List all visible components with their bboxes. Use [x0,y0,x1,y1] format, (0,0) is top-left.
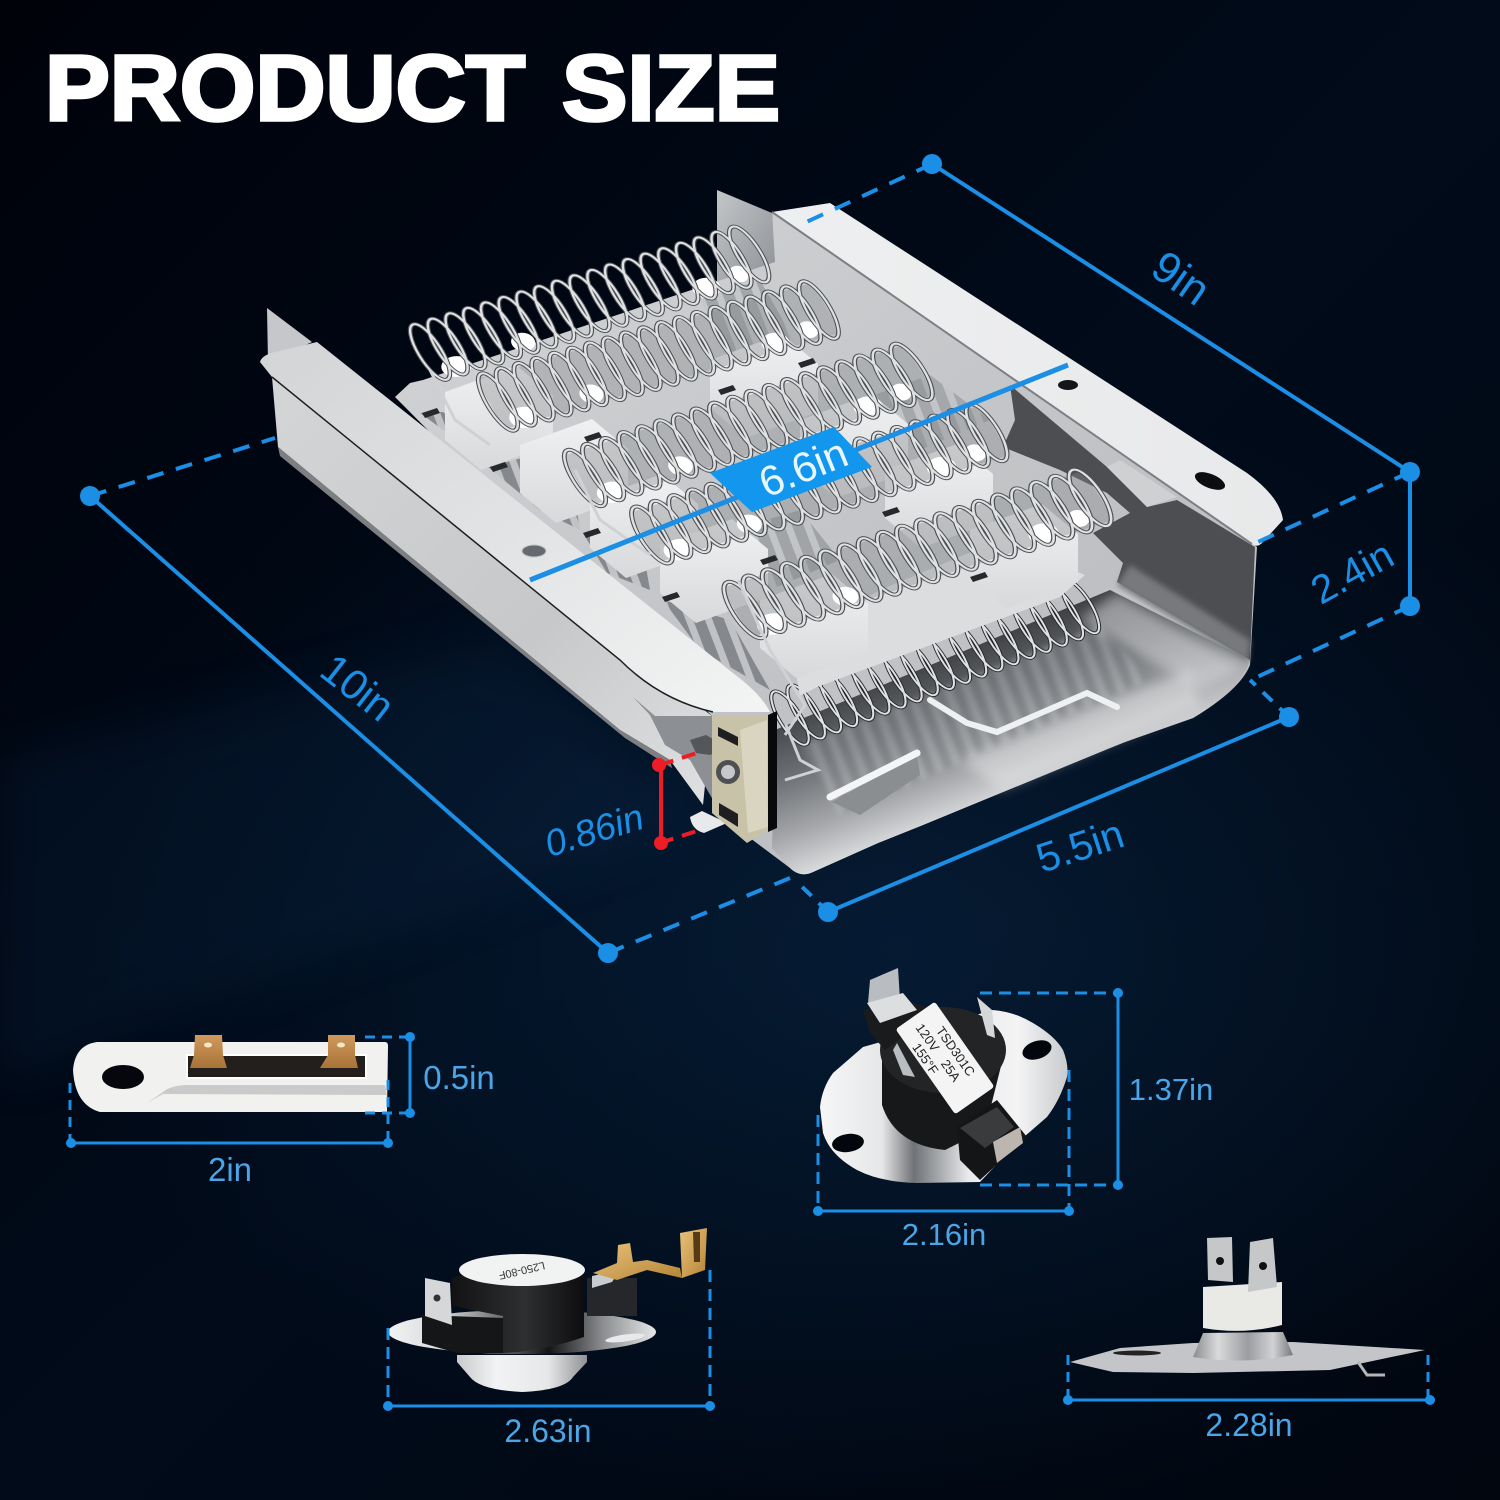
thermal fuse [73,1035,388,1112]
dimension: 2.4in [1255,472,1420,678]
plate clips [422,358,988,602]
coil row 2 [471,278,847,435]
fuse dimension: 2in: 2in [208,1151,252,1188]
coil row 1 [403,223,777,384]
dimension: 0.86in [540,752,700,865]
dimension: 5.5in [795,680,1299,922]
thermostat dimension: 2.16in: 2.16in [902,1217,986,1252]
floor patches [420,280,1000,690]
terminal block [712,711,777,843]
right rail [772,203,1283,546]
thermostat L250-80F [388,1228,707,1392]
coil row 5 [716,466,1120,643]
rating label: TSD301C [933,1024,978,1079]
dimension: 10in: 10in [312,644,403,730]
thermostat dimension: 2.16in [813,1070,1074,1252]
dimension: 9in: 9in [1143,242,1219,315]
thermostat TSD301C [820,968,1068,1183]
back flange [717,190,776,282]
coil row 4 [624,401,1016,568]
dark right wall [1003,385,1255,662]
rail hole [1058,380,1078,390]
mica plates [445,334,1085,696]
left rail [260,342,770,712]
lower tray reflection [772,590,1250,874]
dimension: 9in [800,154,1420,542]
bracket dimension: 2.28in: 2.28in [1205,1407,1293,1443]
fuse dimension: 0.5in: 0.5in [423,1059,495,1096]
coil leads [430,370,818,780]
rail hole [522,545,546,557]
rail slot [1193,469,1227,493]
thermostat bracket [1070,1237,1425,1375]
terminal tabs [690,735,727,833]
left rail wall [272,377,712,805]
thermostat L250-80F: L250-80F [497,1259,546,1281]
left back flange [267,308,312,362]
thermostat dimension: 2.63in [383,1270,715,1449]
dimension: 0.86in: 0.86in [540,796,648,865]
dimension: 6.6in: 6.6in [752,429,854,506]
rating label [896,1002,994,1114]
heater assembly [260,190,1283,874]
dimension: 2.4in: 2.4in [1304,533,1401,613]
fuse dimension: 2in [66,1080,393,1188]
fuse dimension: 0.5in [365,1032,495,1118]
title: PRODUCT [45,36,525,140]
rating label: 25A [938,1057,964,1085]
side hardware [633,697,713,800]
dimension: 10in [80,438,790,963]
gold terminal [593,1228,707,1280]
rating label: 155°F [909,1040,942,1077]
title [45,36,780,140]
thermostat dimension: 1.37in: 1.37in [1129,1072,1213,1107]
thermostat dimension: 1.37in [980,988,1213,1190]
dimension: 5.5in: 5.5in [1031,810,1129,882]
title: SIZE [562,36,780,140]
bracket dimension: 2.28in [1063,1355,1435,1443]
embossed slots [830,693,1117,815]
tray floor [395,212,1257,874]
dimension: 6.6in [530,365,1068,580]
thermostat dimension: 2.63in: 2.63in [504,1413,592,1449]
rating label: 120V [913,1021,943,1054]
coil row 6 [764,576,1106,748]
coil row 3 [556,340,941,510]
